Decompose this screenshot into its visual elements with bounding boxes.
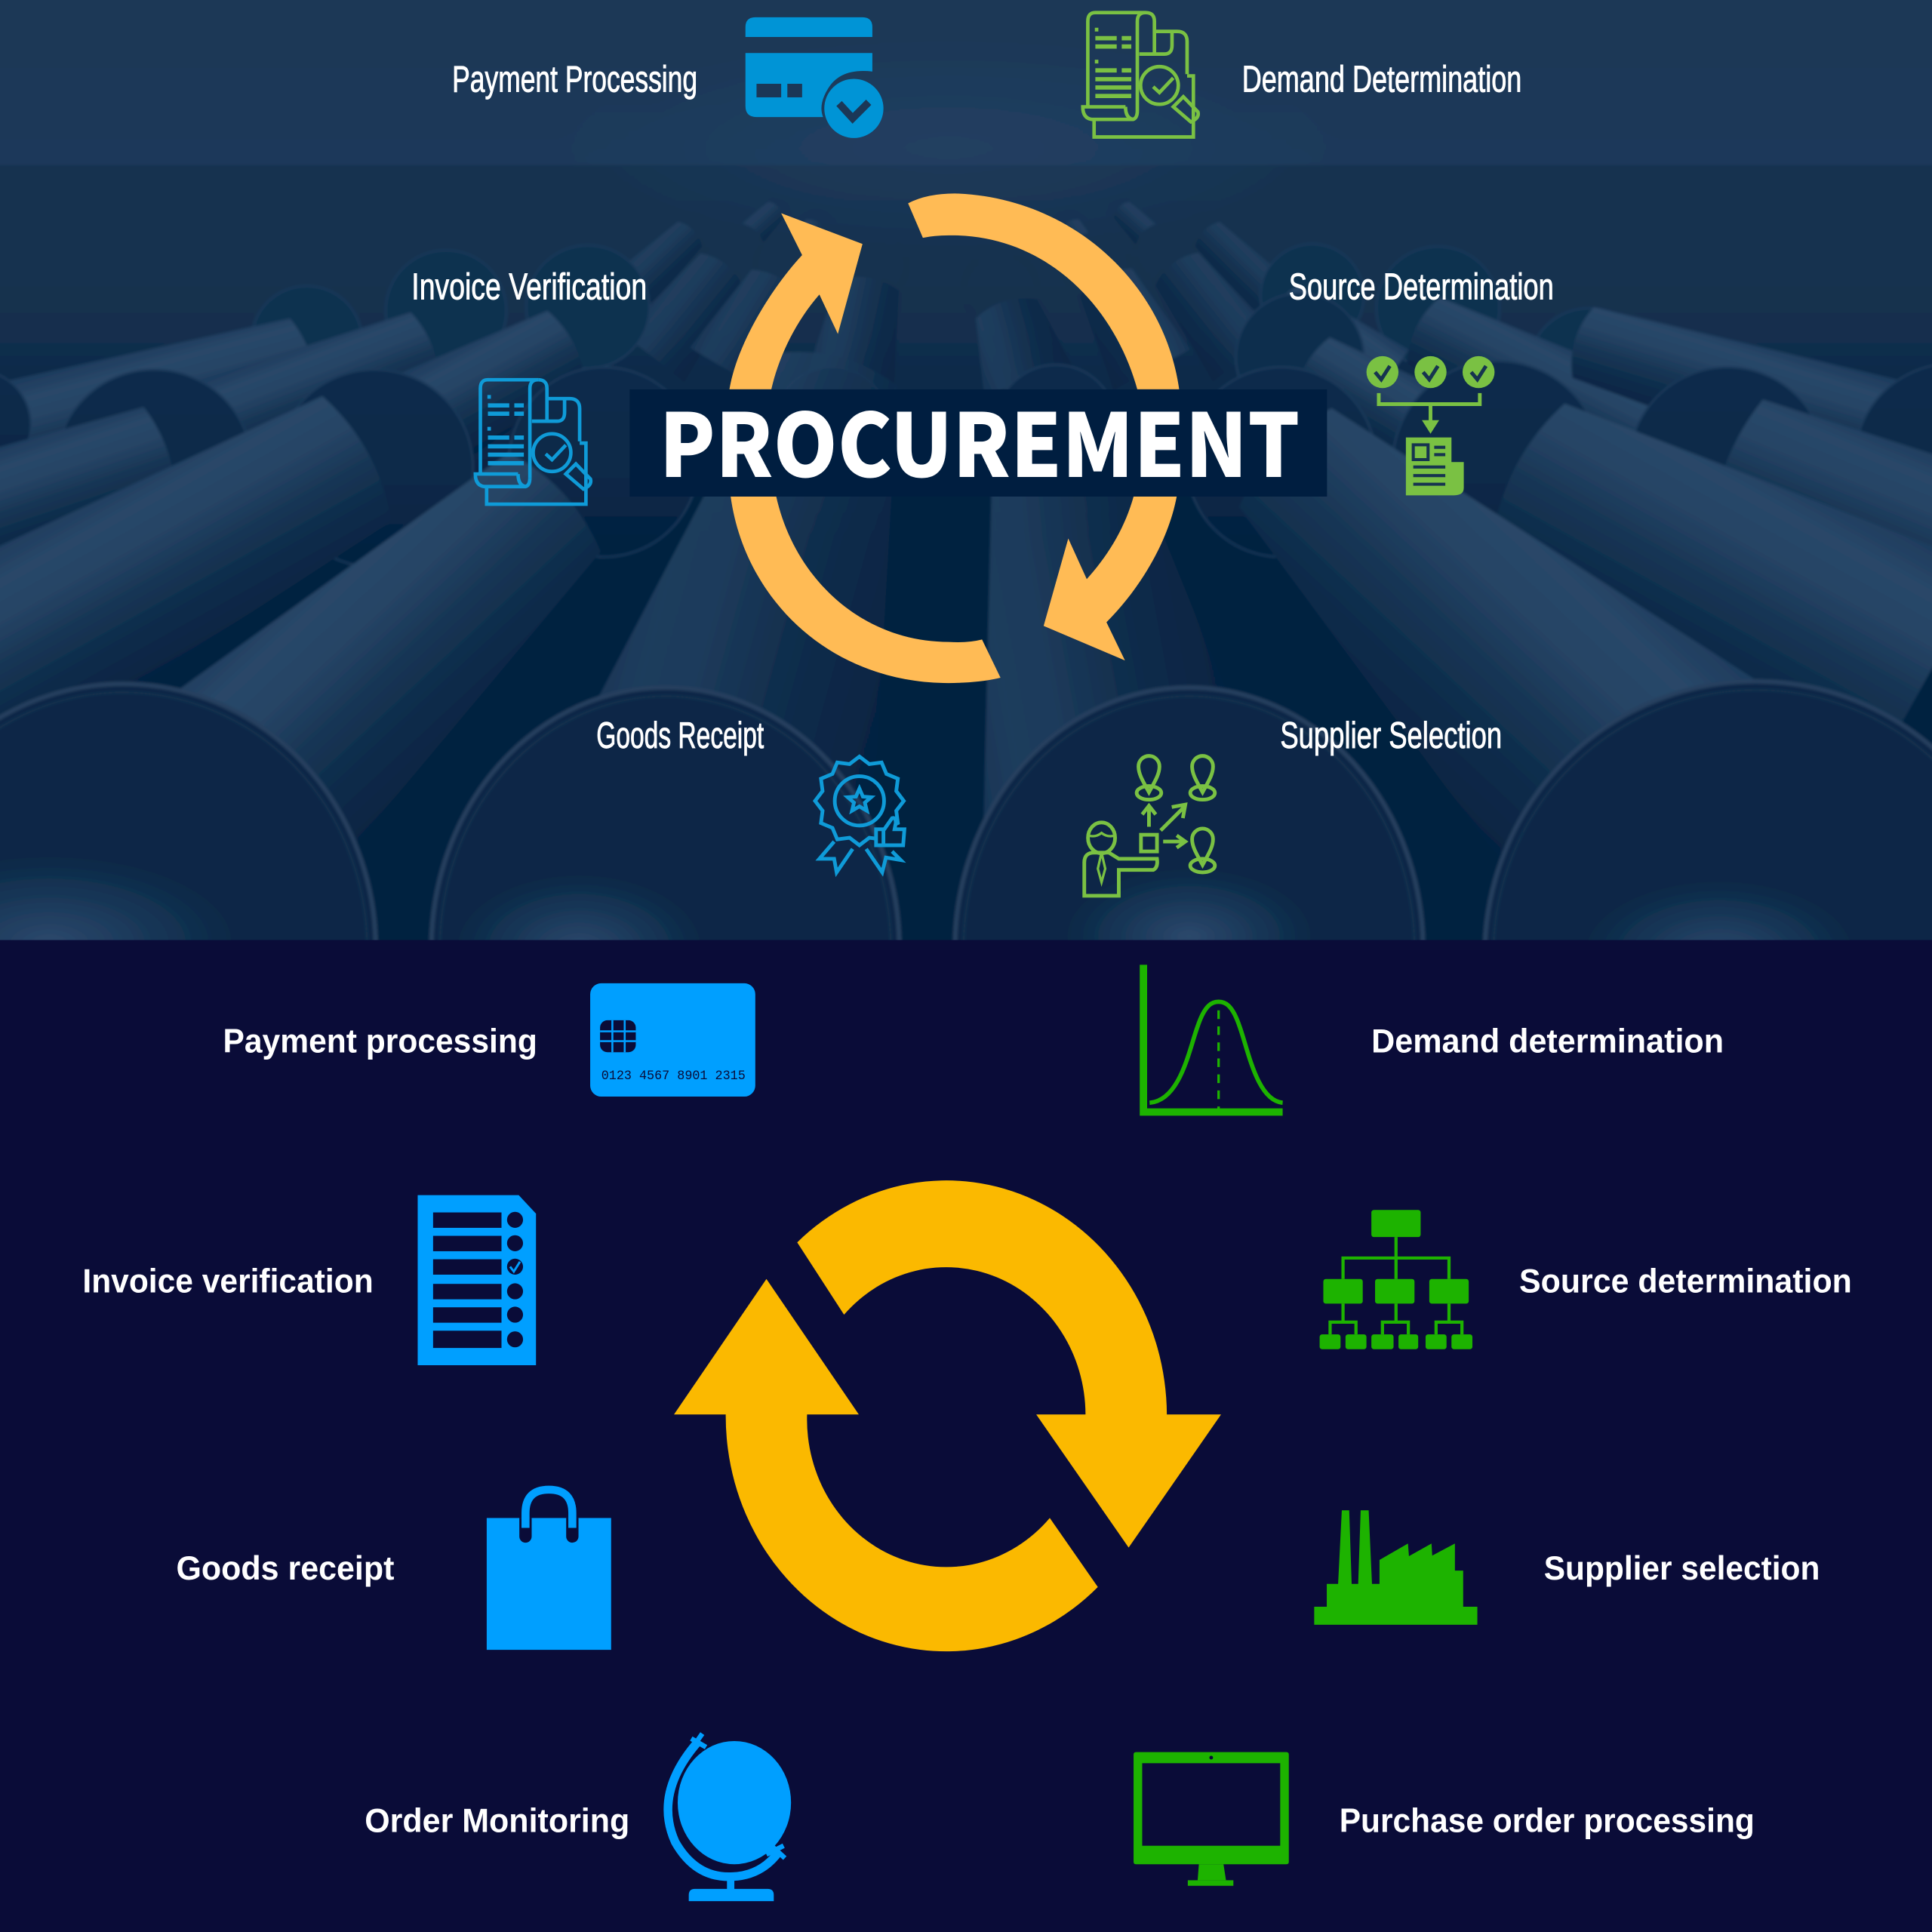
icon: organisation tree	[1320, 1210, 1472, 1349]
label: Demand determination: Demand determination	[1371, 1023, 1724, 1060]
yellow cycle arrows	[674, 1180, 1221, 1651]
icon: person selecting location pins	[1084, 756, 1215, 896]
label: Goods Receipt (top): Goods Receipt	[596, 715, 764, 756]
lower right arrow	[1044, 497, 1177, 660]
icon: credit card	[590, 983, 755, 1097]
lower left arc	[731, 497, 1001, 683]
icon: desk globe	[668, 1734, 791, 1901]
icon: bell curve chart	[1143, 964, 1283, 1112]
title: PROCUREMENT: PROCUREMENT	[659, 377, 1300, 503]
sky above the horizon	[0, 0, 1932, 165]
icon: three checks into document	[1367, 356, 1494, 495]
third row tubes	[8, 317, 309, 438]
soft reflections on lower discs	[0, 875, 191, 940]
second row flanges	[0, 361, 1932, 571]
label: Invoice Verification (top): Invoice Verification	[411, 267, 647, 308]
upper left arrow	[730, 213, 863, 389]
icon: factory	[1314, 1510, 1478, 1625]
near tubes	[0, 406, 172, 546]
label: Payment processing: Payment processing	[223, 1023, 537, 1060]
panel: pipeline photo background	[0, 0, 1932, 940]
label: Order Monitoring: Order Monitoring	[365, 1803, 629, 1840]
panel: lower navy background	[0, 940, 1932, 1932]
label: Source determination: Source determination	[1519, 1263, 1852, 1300]
icon: award badge with thumb	[815, 756, 904, 872]
upper clockwise arrow	[797, 1180, 1221, 1548]
label: Goods receipt: Goods receipt	[176, 1550, 395, 1587]
label: Invoice verification: Invoice verification	[82, 1263, 374, 1300]
front flange discs	[0, 677, 1932, 940]
label: Supplier Selection (top): Supplier Selection	[1280, 715, 1502, 756]
orange procurement cycle arrows	[730, 193, 1179, 683]
third row flanges	[257, 246, 1590, 368]
label: Demand Determination (top): Demand Determination	[1242, 60, 1521, 100]
icon: shopping bag	[487, 1490, 611, 1650]
label: Source Determination (top): Source Determination	[1289, 267, 1554, 308]
far rows of pipes	[628, 202, 1269, 389]
icon: checklist document	[417, 1195, 536, 1365]
icon: card with check	[746, 17, 884, 138]
icon: desktop monitor	[1134, 1752, 1289, 1886]
icon: document with magnifier (blue)	[475, 380, 591, 504]
upper right arc	[908, 193, 1179, 389]
label: Supplier selection: Supplier selection	[1544, 1550, 1820, 1587]
lower clockwise arrow	[674, 1279, 1098, 1651]
label: Payment Processing (top): Payment Processing	[452, 60, 697, 100]
label: Purchase order processing: Purchase order processing	[1340, 1803, 1755, 1840]
icon: credit card: 0123 4567 8901 2315	[601, 1069, 746, 1084]
icon: document with magnifier (green)	[1083, 13, 1198, 137]
